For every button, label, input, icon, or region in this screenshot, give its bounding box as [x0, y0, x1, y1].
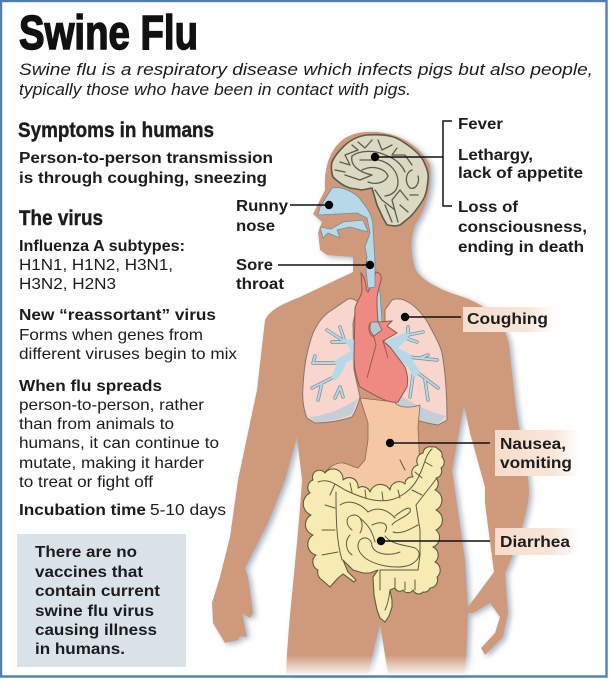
callout: brain symptoms: Loss of	[458, 199, 519, 216]
figure: fade at the bottom of the legs	[270, 655, 480, 677]
subtitle	[19, 61, 593, 99]
callout: coughing: Coughing	[467, 311, 548, 328]
organ: brain	[331, 135, 428, 226]
callout box: no vaccines	[17, 534, 186, 667]
text block: reassortant virus: different viruses begin to mix	[19, 346, 237, 363]
callout: coughing	[401, 307, 555, 332]
organ: trachea	[373, 280, 382, 322]
callout box: no vaccines: in humans.	[35, 641, 125, 658]
section: the virus: H3N2, H2N3	[19, 276, 116, 293]
text block: when flu spreads: mutate, making it harder	[19, 455, 205, 472]
callout: diarrhea	[377, 528, 579, 555]
organ: left lung	[303, 299, 360, 423]
section: symptoms in humans: is through coughing, sneezing	[19, 170, 267, 187]
subtitle: Swine flu is a respiratory disease which infects pigs but also people,	[19, 61, 593, 79]
organ: right lung base shading	[396, 396, 446, 424]
callout: sore throat	[236, 257, 374, 293]
callout box: no vaccines: vaccines that	[35, 564, 144, 581]
organ: right lung	[385, 299, 447, 425]
text block: reassortant virus: Forms when genes from	[19, 327, 203, 344]
organ: heart and great vessels	[354, 272, 408, 402]
text block: when flu spreads: When flu spreads	[19, 378, 162, 395]
callout: runny nose	[236, 198, 333, 235]
section: symptoms in humans: Person-to-person transmission	[19, 150, 273, 167]
callout: brain symptoms	[371, 116, 587, 256]
callout: runny nose: nose	[236, 218, 275, 235]
text block: when flu spreads: than from animals to	[19, 416, 174, 433]
callout box: no vaccines: swine flu virus	[35, 603, 154, 620]
text block: reassortant virus: New “reassortant” virus	[19, 307, 216, 324]
organ: stomach	[325, 398, 420, 500]
text block: when flu spreads: to treat or fight off	[19, 474, 154, 491]
section: symptoms in humans: Symptoms in humans	[18, 119, 214, 142]
organ: nasal cavity and throat	[318, 188, 375, 288]
organ: left lung base shading	[309, 398, 358, 422]
callout: brain symptoms: Lethargy,	[458, 147, 533, 164]
callout: brain symptoms: ending in death	[458, 239, 584, 256]
title: Swine Flu	[19, 7, 198, 60]
callout box: no vaccines: contain current	[35, 583, 161, 600]
section: symptoms in humans	[18, 119, 273, 187]
organ: intestine folds	[318, 449, 437, 610]
subtitle: typically those who have been in contact with pigs.	[19, 81, 411, 99]
organ: brain folds	[335, 140, 419, 222]
section: the virus: H1N1, H1N2, H3N1,	[19, 257, 173, 274]
callout: sore throat: throat	[236, 276, 285, 293]
organ: intestines	[303, 447, 444, 622]
section: the virus: Influenza A subtypes:	[19, 238, 185, 255]
text block: incubation time: 5-10 days	[150, 502, 226, 519]
callout: diarrhea: Diarrhea	[500, 534, 570, 551]
organ: bronchi	[312, 327, 438, 400]
text block: when flu spreads: humans, it can continue to	[19, 435, 219, 452]
callout box: no vaccines: There are no	[35, 544, 137, 561]
callout: brain symptoms: Fever	[458, 116, 503, 133]
organ: mouth cavity	[320, 220, 368, 238]
callout: nausea, vomiting: vomiting	[500, 455, 572, 472]
section: the virus	[19, 207, 185, 293]
callout: sore throat: Sore	[236, 257, 273, 274]
callout: brain symptoms: lack of appetite	[458, 165, 583, 182]
callout: nausea, vomiting: Nausea,	[500, 436, 566, 453]
text block: when flu spreads	[19, 378, 219, 491]
section: the virus: The virus	[19, 207, 103, 230]
callout: nausea, vomiting	[386, 430, 579, 476]
text block: incubation time	[19, 502, 226, 519]
callout: runny nose: Runny	[236, 198, 288, 215]
text block: incubation time: Incubation time	[19, 502, 146, 519]
callout box: no vaccines: causing illness	[35, 622, 157, 639]
callout: brain symptoms: consciousness,	[458, 219, 587, 236]
figure: human body silhouette	[212, 132, 529, 674]
text block: reassortant virus	[19, 307, 237, 363]
text block: when flu spreads: person-to-person, rather	[19, 397, 205, 414]
